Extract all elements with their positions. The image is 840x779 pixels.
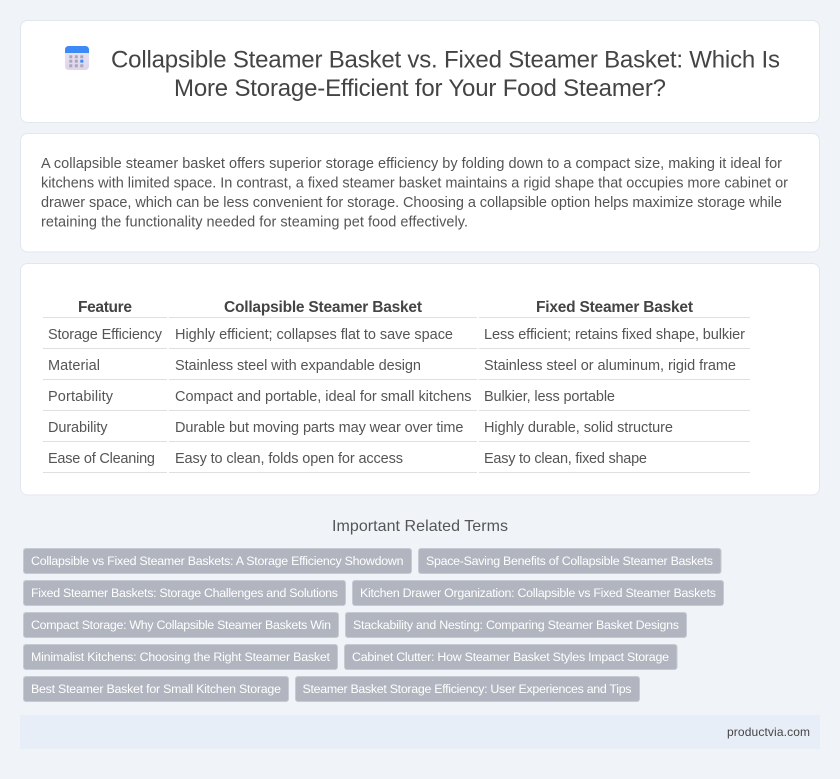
description text: drawer space, which can be less convenient for storage. Choosing a collapsible option helps maximize storage while bbox=[41, 195, 782, 211]
icon: calendar bbox=[65, 46, 89, 70]
tag bbox=[24, 548, 412, 574]
footer bbox=[20, 715, 820, 749]
row: portability: Bulkier, less portable bbox=[484, 389, 615, 405]
row: storage efficiency bbox=[43, 327, 750, 348]
row: material: Material bbox=[48, 358, 100, 374]
tag: Minimalist Kitchens: Choosing the Right Steamer Basket bbox=[31, 650, 331, 664]
tag bbox=[296, 676, 640, 702]
row: durability bbox=[43, 420, 750, 442]
row: portability: Portability bbox=[48, 389, 114, 405]
panel: description bbox=[20, 134, 820, 252]
row: durability: Durability bbox=[48, 420, 108, 436]
title: More Storage-Efficient for Your Food Steamer? bbox=[174, 75, 666, 102]
tag bbox=[24, 580, 346, 606]
row: portability: Compact and portable, ideal for small kitchens bbox=[175, 389, 472, 405]
row: ease of cleaning: Easy to clean, folds open for access bbox=[175, 451, 403, 467]
tag bbox=[344, 644, 677, 670]
tag bbox=[24, 612, 338, 638]
tag bbox=[346, 612, 686, 638]
table header row: Fixed Steamer Basket bbox=[536, 299, 693, 316]
tag bbox=[418, 548, 721, 574]
tag: Fixed Steamer Baskets: Storage Challenges and Solutions bbox=[31, 586, 338, 600]
tag: Compact Storage: Why Collapsible Steamer Baskets Win bbox=[31, 618, 331, 632]
tag: Kitchen Drawer Organization: Collapsible vs Fixed Steamer Baskets bbox=[360, 586, 716, 600]
tag bbox=[24, 676, 288, 702]
row: storage efficiency: Less efficient; retains fixed shape, bulkier bbox=[484, 327, 745, 343]
heading: important related terms: Important Related Terms bbox=[332, 518, 508, 535]
row: ease of cleaning: Easy to clean, fixed shape bbox=[484, 451, 647, 467]
tag bbox=[24, 644, 338, 670]
table header row bbox=[43, 299, 750, 318]
tag: Stackability and Nesting: Comparing Steamer Basket Designs bbox=[353, 618, 679, 632]
tag: Best Steamer Basket for Small Kitchen Storage bbox=[31, 682, 281, 696]
description text: retaining the functionality needed for steaming pet food effectively. bbox=[41, 214, 468, 230]
row: ease of cleaning: Ease of Cleaning bbox=[48, 451, 155, 467]
tag: Steamer Basket Storage Efficiency: User Experiences and Tips bbox=[302, 682, 632, 696]
description text: kitchens with limited space. In contrast, a fixed steamer basket maintains a rigid shape that occupies more cabinet or bbox=[41, 176, 788, 192]
tag: Cabinet Clutter: How Steamer Basket Styles Impact Storage bbox=[352, 650, 669, 664]
row: storage efficiency: Highly efficient; collapses flat to save space bbox=[175, 327, 453, 343]
tag: Space-Saving Benefits of Collapsible Steamer Baskets bbox=[426, 554, 713, 568]
row: portability bbox=[43, 389, 750, 410]
panel: comparison table bbox=[20, 264, 820, 495]
related terms tags bbox=[24, 548, 724, 702]
panel: title header bbox=[20, 20, 820, 122]
row: ease of cleaning bbox=[43, 451, 750, 472]
description text bbox=[41, 156, 788, 230]
row: material bbox=[43, 358, 750, 380]
description text: A collapsible steamer basket offers superior storage efficiency by folding down to a compact size, making it ideal for bbox=[41, 156, 782, 172]
tag: Collapsible vs Fixed Steamer Baskets: A Storage Efficiency Showdown bbox=[31, 554, 404, 568]
tag bbox=[352, 580, 724, 606]
row: durability: Highly durable, solid structure bbox=[484, 420, 673, 436]
table header row: Feature bbox=[78, 299, 132, 316]
row: storage efficiency: Storage Efficiency bbox=[48, 327, 163, 343]
footer: productvia.com bbox=[727, 725, 810, 739]
title: Collapsible Steamer Basket vs. Fixed Steamer Basket: Which Is bbox=[111, 46, 780, 74]
row: durability: Durable but moving parts may wear over time bbox=[175, 420, 464, 436]
table header row: Collapsible Steamer Basket bbox=[224, 299, 422, 316]
row: material: Stainless steel with expandable design bbox=[175, 358, 421, 374]
row: material: Stainless steel or aluminum, rigid frame bbox=[484, 358, 736, 374]
title bbox=[111, 46, 780, 102]
